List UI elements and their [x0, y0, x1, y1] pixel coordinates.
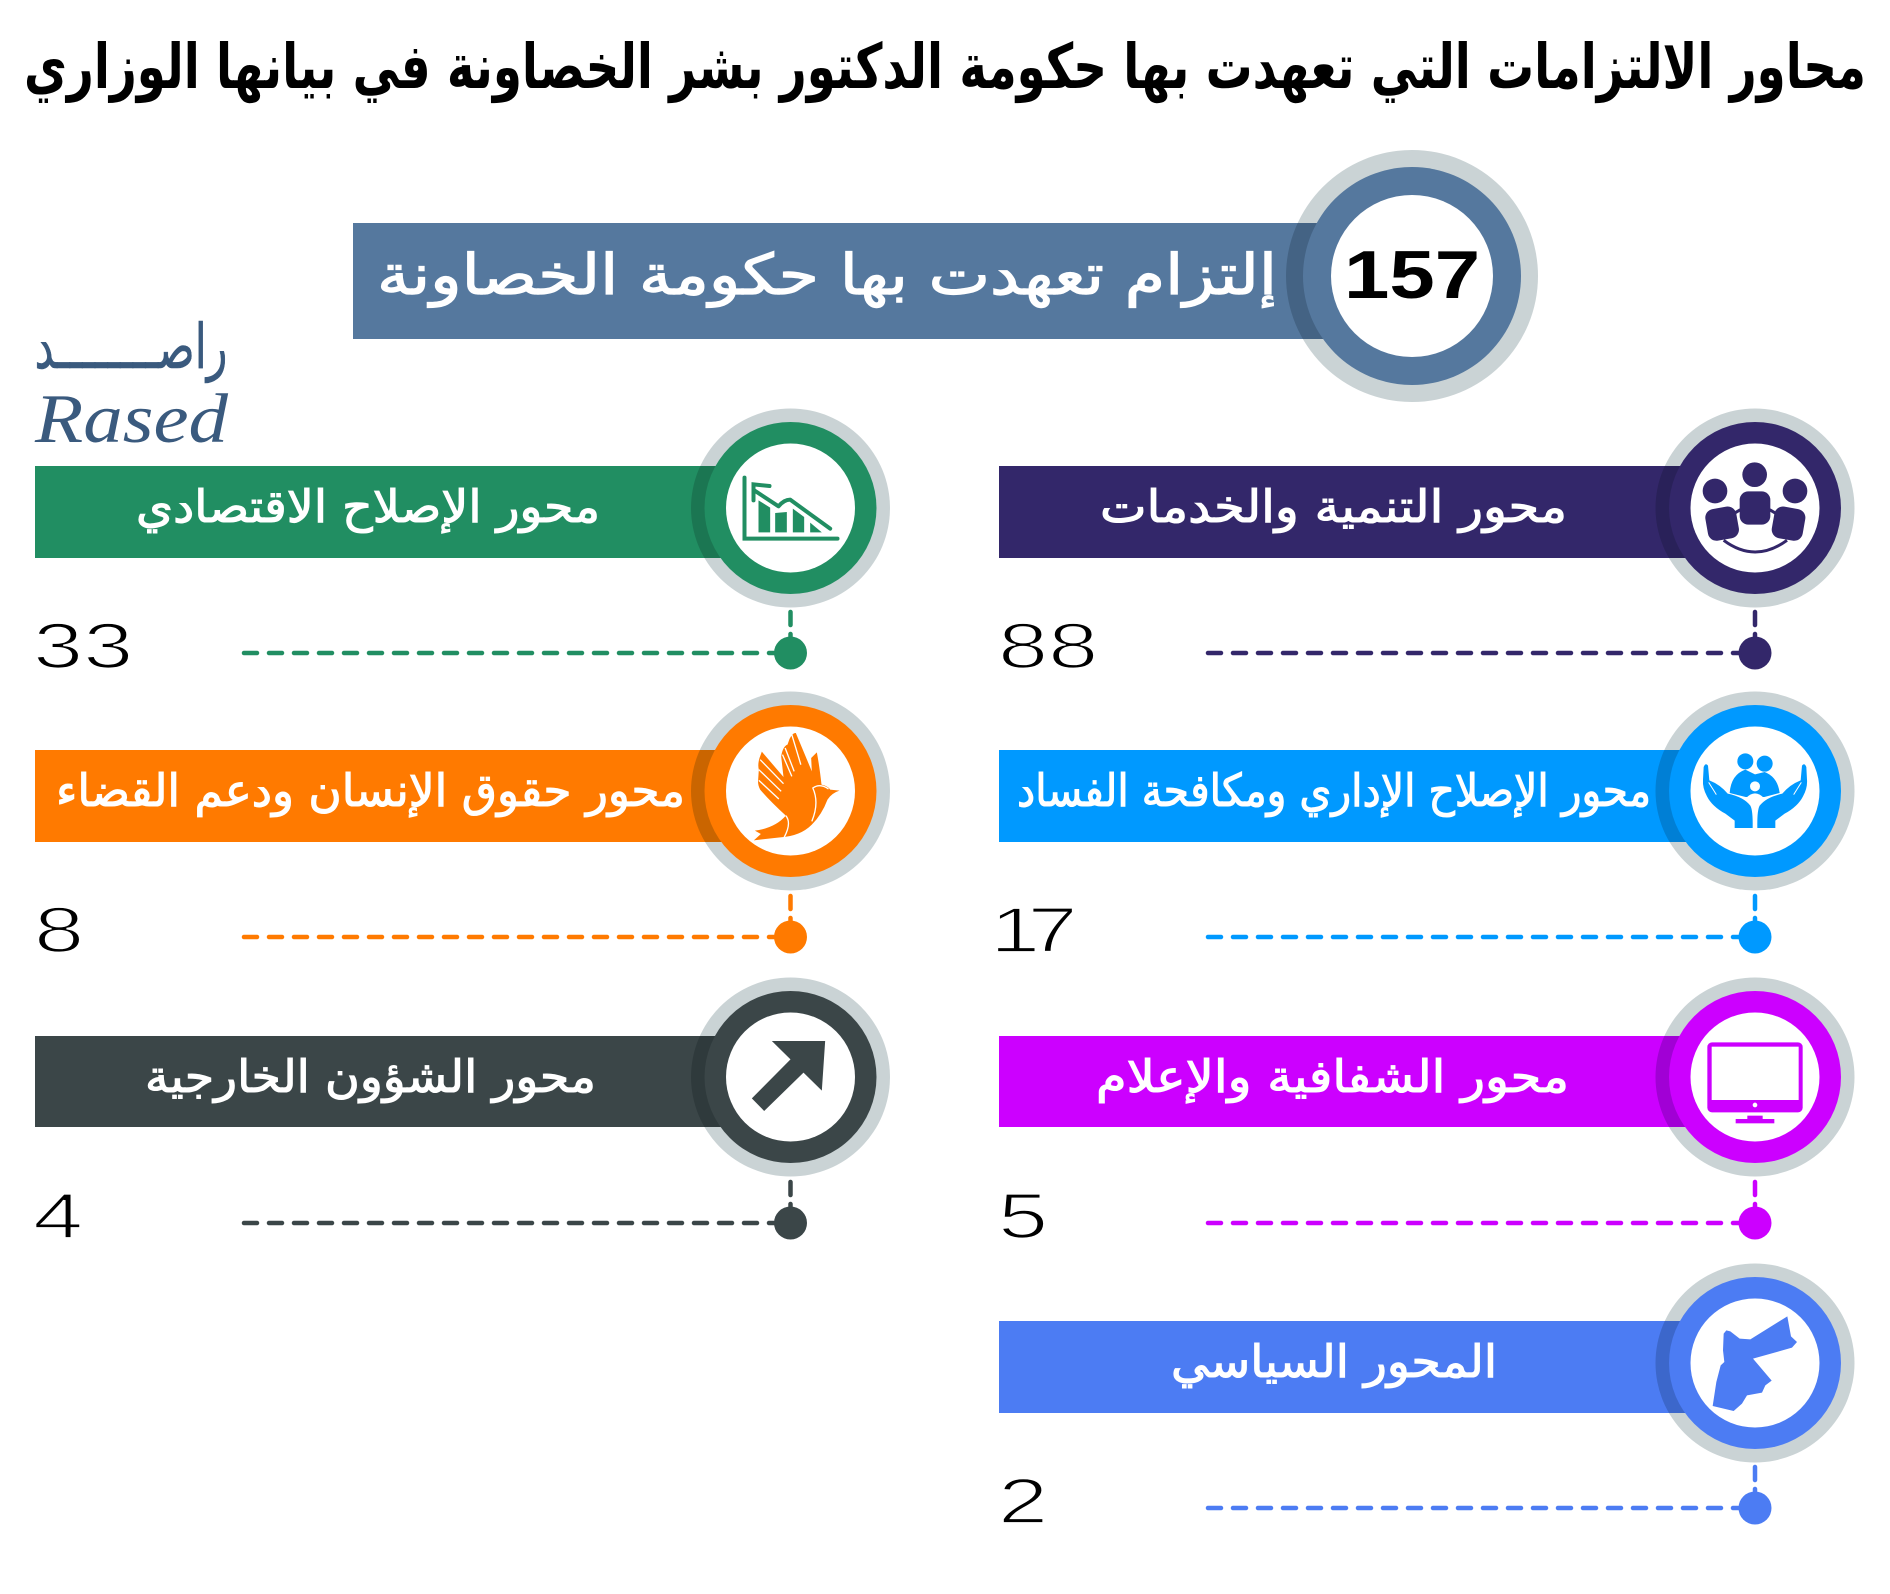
ring: [1669, 422, 1841, 594]
icon: monitor: [1707, 1042, 1803, 1123]
halo ring: [691, 692, 890, 890]
bar: [35, 1036, 790, 1127]
bar: [35, 466, 790, 558]
connector: [244, 612, 807, 670]
value: 88: [998, 610, 1098, 682]
icon: people group: [1703, 462, 1807, 552]
connector: [1208, 896, 1772, 954]
label: محور الإصلاح الاقتصادي: [136, 480, 600, 533]
icon: declining chart: [745, 478, 837, 539]
total number: 157: [1344, 236, 1480, 312]
label: محور الإصلاح الإداري ومكافحة الفساد: [1017, 764, 1651, 818]
panel: transparency and media: [998, 978, 1854, 1252]
inner circle: [726, 444, 855, 572]
value: 8: [34, 894, 84, 966]
value: 33: [33, 610, 133, 682]
label: محور الشؤون الخارجية: [145, 1050, 596, 1104]
banner text: إلتزام تعهدت بها حكومة الخصاونة: [377, 243, 1277, 309]
bar: [999, 466, 1755, 558]
inner circle: [1690, 1012, 1820, 1142]
panel: development and services: [998, 408, 1854, 682]
bar: [35, 750, 790, 842]
halo ring: [1656, 978, 1854, 1176]
panel: foreign affairs: [33, 978, 890, 1252]
logo arabic: راصــــــــد: [34, 310, 228, 383]
panel: economic reform: [33, 408, 890, 682]
bar: [999, 1321, 1755, 1413]
value: 2: [998, 1465, 1048, 1537]
panel: human rights and judiciary: [34, 692, 890, 966]
label: محور التنمية والخدمات: [1100, 480, 1567, 534]
icon: map of Jordan: [1713, 1316, 1797, 1411]
inner circle: [726, 726, 855, 856]
connector: [1208, 1467, 1772, 1524]
icon: arrow: [752, 1041, 825, 1111]
panel: administrative reform and anti-corruption: [990, 692, 1854, 966]
icon: hands and family: [1703, 753, 1807, 828]
halo ring: [1656, 692, 1854, 890]
logo latin: Rased: [34, 381, 229, 458]
panel: political: [998, 1264, 1854, 1537]
bar: [999, 750, 1755, 842]
banner inner circle: [1331, 195, 1493, 357]
halo ring: [691, 408, 890, 608]
halo ring: [1656, 1264, 1854, 1462]
banner bar: [353, 223, 1412, 339]
banner halo ring: [1286, 150, 1538, 402]
ring: [1669, 1277, 1841, 1449]
inner circle: [726, 1012, 855, 1142]
value: 4: [33, 1180, 83, 1252]
ring: [1669, 991, 1841, 1163]
connector: [244, 896, 807, 954]
label: محور حقوق الإنسان ودعم القضاء: [56, 764, 685, 818]
label: المحور السياسي: [1171, 1335, 1497, 1388]
inner circle: [1690, 1298, 1820, 1428]
panel: total commitments banner: [353, 150, 1538, 402]
halo ring: [1656, 408, 1854, 608]
connector: [244, 1182, 807, 1240]
inner circle: [1690, 726, 1820, 856]
connector: [1208, 612, 1772, 670]
ring: [704, 991, 876, 1163]
icon: bird hand: [754, 733, 839, 840]
bar: [999, 1036, 1755, 1127]
label: محور الشفافية والإعلام: [1096, 1050, 1569, 1104]
ring: [704, 705, 876, 877]
value: 17: [990, 894, 1078, 966]
connector: [1208, 1182, 1772, 1240]
logo: Rased: [34, 310, 229, 458]
ring: [1669, 705, 1841, 877]
inner circle: [1690, 444, 1820, 572]
ring: [704, 422, 876, 594]
halo ring: [691, 978, 890, 1176]
banner ring: [1303, 167, 1521, 385]
value: 5: [998, 1180, 1048, 1252]
